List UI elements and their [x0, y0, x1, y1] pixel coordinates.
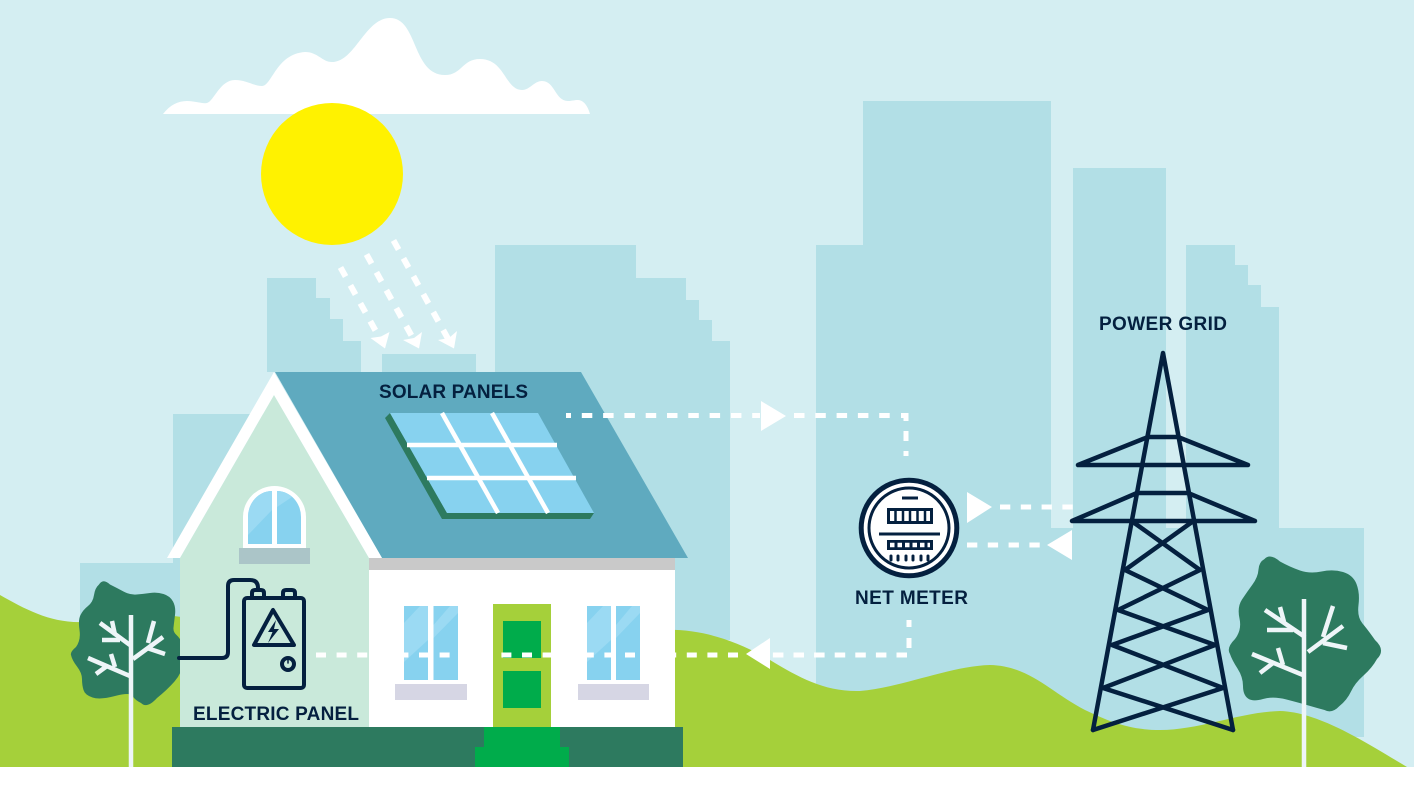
solar panel array [385, 413, 594, 519]
city skyline buildings [80, 101, 1364, 737]
cloud [163, 18, 590, 114]
right window [578, 606, 649, 700]
gable wall [180, 395, 369, 727]
white wall [369, 570, 675, 727]
net meter icon [861, 480, 957, 576]
label: net meter: NET METER [855, 588, 968, 609]
power flow: solar panels to net meter [566, 401, 906, 456]
label: power grid: POWER GRID [1099, 314, 1227, 335]
attic window [239, 486, 310, 564]
sun [261, 103, 403, 245]
power grid tower [1072, 353, 1255, 730]
power flow: grid to net meter [967, 530, 1072, 560]
blue roof [275, 372, 688, 558]
label: electric panel: ELECTRIC PANEL [193, 704, 359, 725]
white gable trim [167, 372, 382, 558]
house [167, 372, 688, 767]
electric panel icon [179, 580, 304, 688]
foundation [172, 727, 683, 767]
gutter [369, 558, 675, 570]
door [493, 604, 551, 727]
tree: left [71, 581, 184, 767]
power flow: net meter to grid [967, 492, 1073, 523]
left window [395, 606, 467, 700]
sun rays: dashed arrows [340, 240, 457, 348]
label: solar panels: SOLAR PANELS [379, 382, 528, 403]
power flow: net meter to electric panel [316, 620, 909, 669]
green hills [0, 595, 1407, 767]
steps [475, 727, 569, 767]
tree: right [1229, 557, 1381, 767]
